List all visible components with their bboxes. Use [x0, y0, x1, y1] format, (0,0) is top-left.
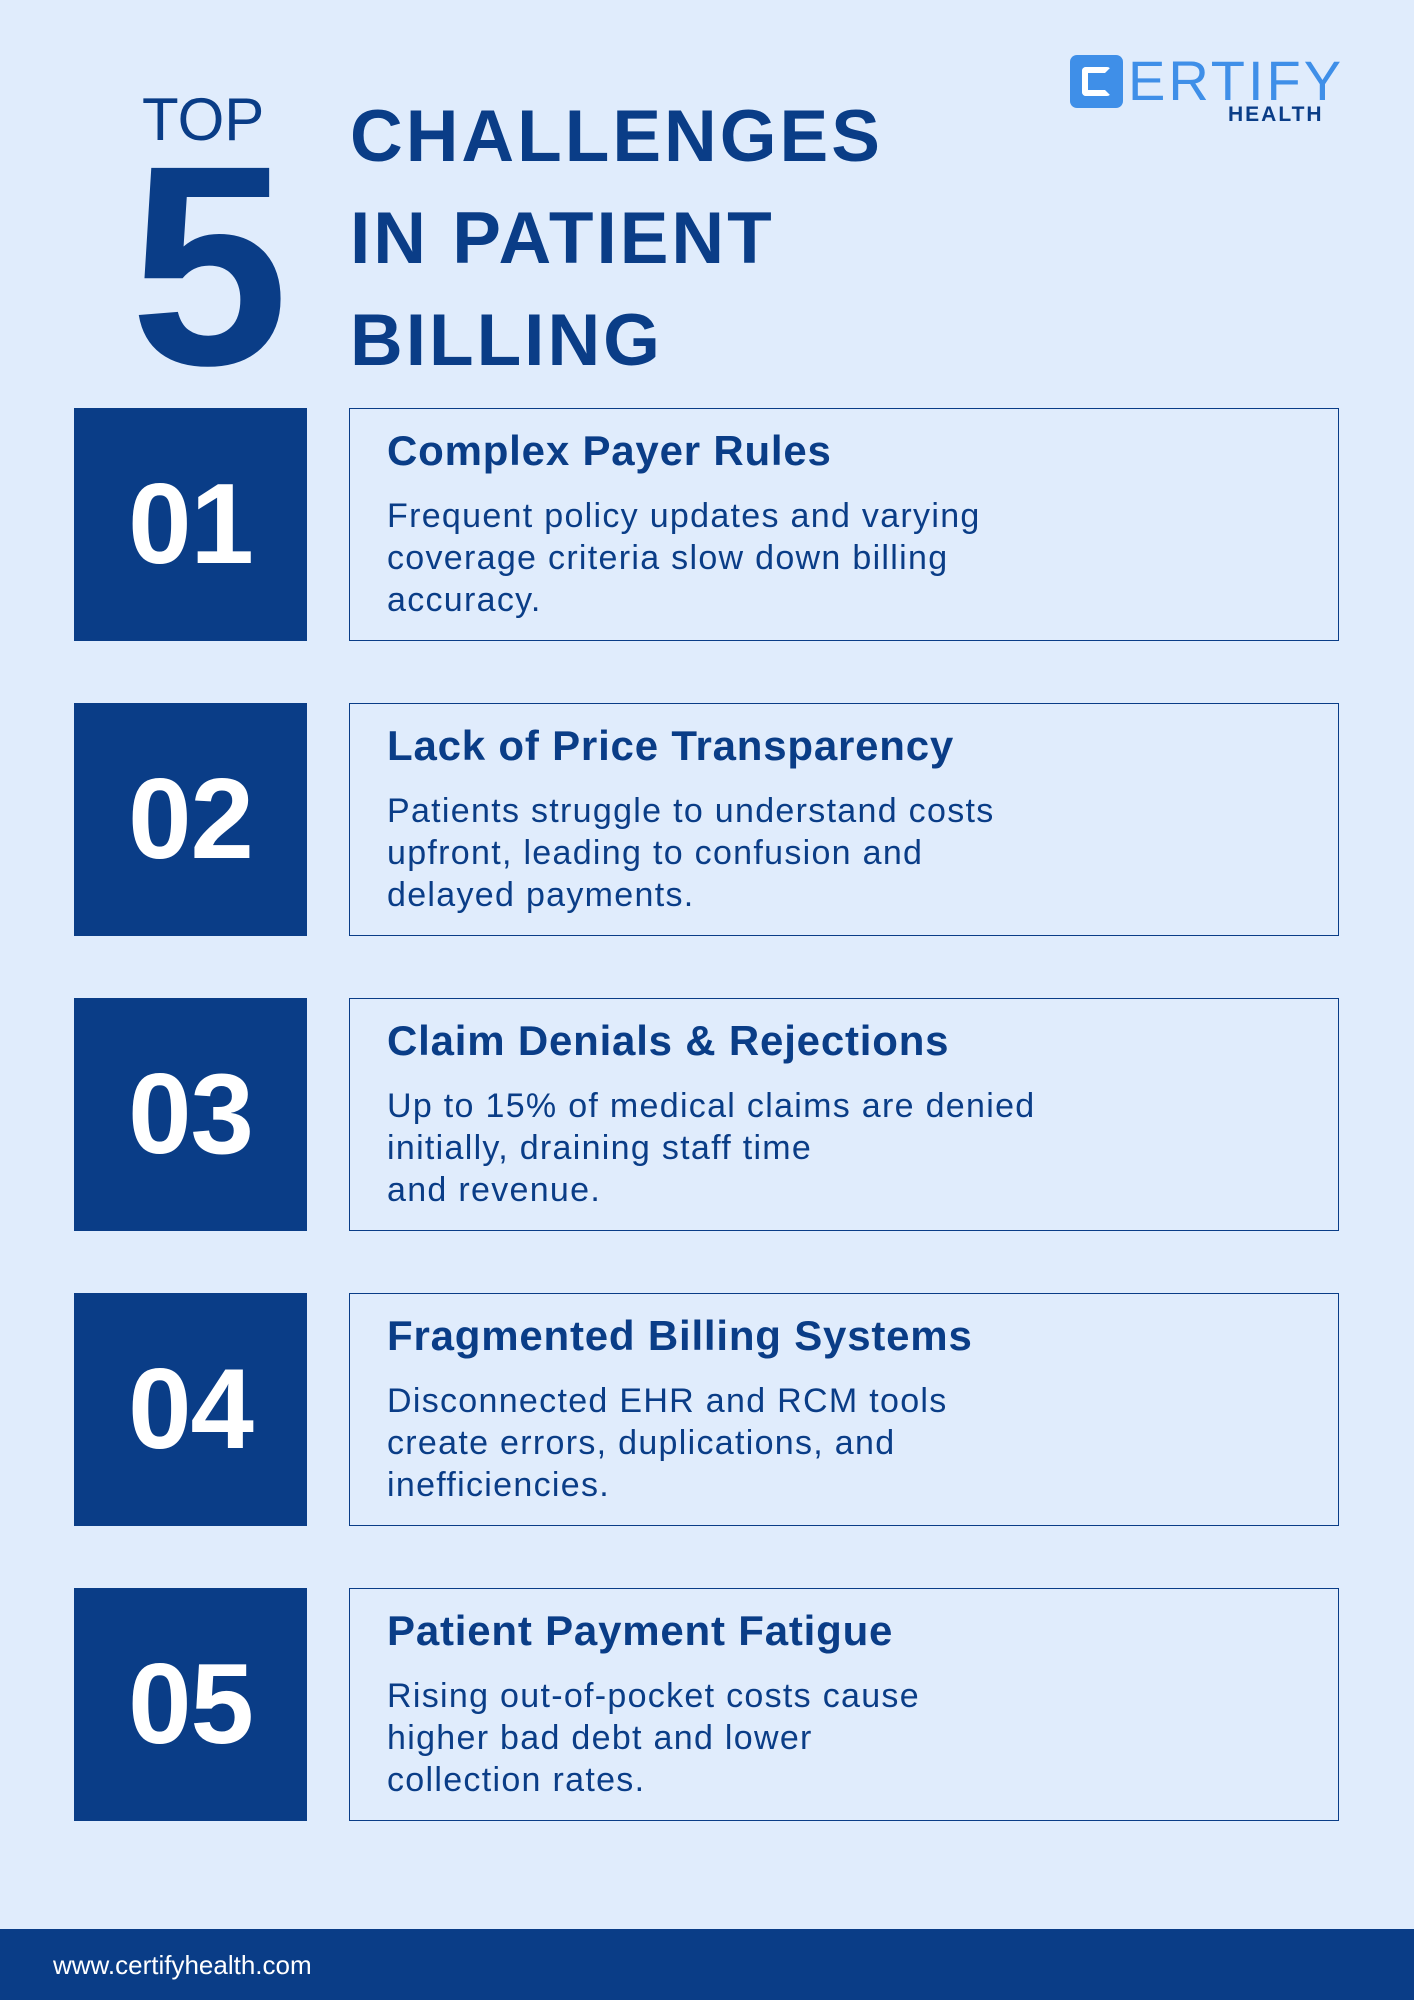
item 04: create errors, duplications, and: [387, 1424, 895, 1462]
item 05: higher bad debt and lower: [387, 1719, 813, 1757]
icon: C square: [1070, 55, 1123, 108]
footer: [0, 1929, 1414, 2000]
logo text: ERTIFY: [1128, 49, 1344, 112]
item 01: 01: [128, 461, 253, 588]
item 04: [74, 1293, 1339, 1526]
item 04: Disconnected EHR and RCM tools: [387, 1382, 948, 1420]
item 03: initially, draining staff time: [387, 1129, 812, 1167]
item 02: delayed payments.: [387, 876, 694, 914]
item 01: Complex Payer Rules: [387, 427, 832, 474]
title: CHALLENGES: [350, 96, 883, 177]
item 02: Patients struggle to understand costs: [387, 792, 995, 830]
footer: www.certifyhealth.com: [53, 1950, 312, 1980]
item 01: Frequent policy updates and varying: [387, 497, 981, 535]
title: [350, 96, 883, 381]
item 01: [74, 408, 1339, 641]
item 02: Lack of Price Transparency: [387, 722, 954, 769]
title: top 5: TOP: [142, 86, 264, 153]
item 05: Rising out-of-pocket costs cause: [387, 1677, 920, 1715]
item 03: Up to 15% of medical claims are denied: [387, 1087, 1035, 1125]
item 04: inefficiencies.: [387, 1466, 610, 1504]
item 03: Claim Denials & Rejections: [387, 1017, 949, 1064]
item 03: [74, 998, 1339, 1231]
item 03: 03: [128, 1051, 253, 1178]
item 02: [74, 703, 1339, 936]
title: top 5: 5: [130, 107, 279, 425]
item 02: upfront, leading to confusion and: [387, 834, 923, 872]
item 04: Fragmented Billing Systems: [387, 1312, 973, 1359]
item 04: 04: [128, 1346, 253, 1473]
logo: [1070, 49, 1344, 126]
title: BILLING: [350, 300, 663, 381]
item 05: 05: [128, 1641, 253, 1768]
item 03: and revenue.: [387, 1171, 601, 1209]
item 05: collection rates.: [387, 1761, 645, 1799]
item 01: accuracy.: [387, 581, 542, 619]
title: IN PATIENT: [350, 198, 775, 279]
item 05: Patient Payment Fatigue: [387, 1607, 893, 1654]
item 01: coverage criteria slow down billing: [387, 539, 948, 577]
logo subtext: HEALTH: [1228, 103, 1324, 126]
item 02: 02: [128, 756, 253, 883]
item 05: [74, 1588, 1339, 1821]
